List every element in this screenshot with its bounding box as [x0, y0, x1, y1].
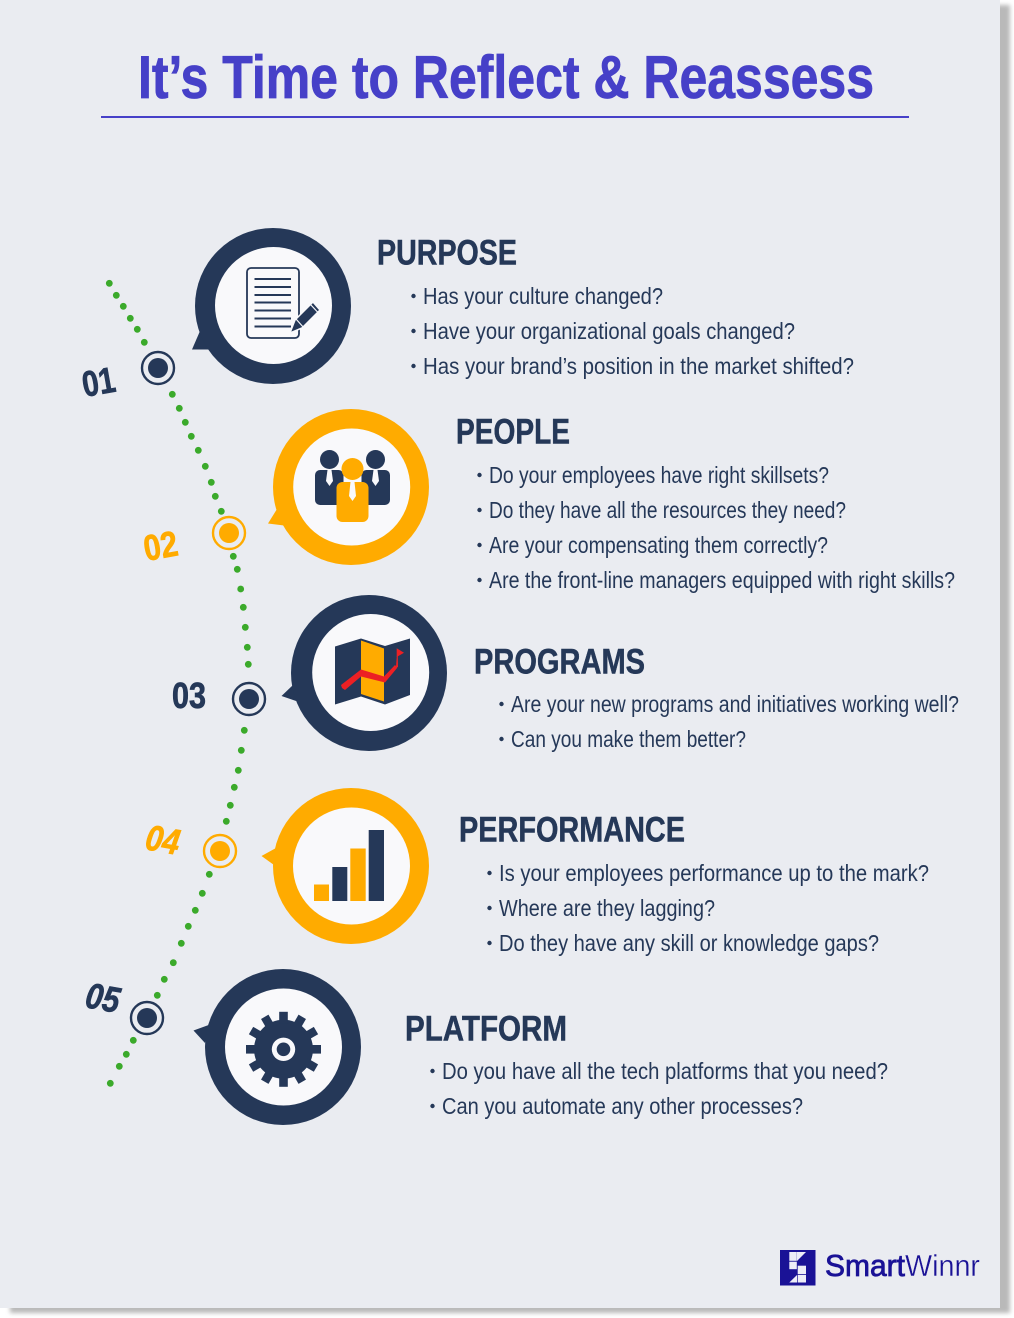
marker 02	[213, 517, 245, 549]
text block: people	[456, 412, 955, 593]
number 01: 01	[79, 359, 118, 405]
text block: people: PEOPLE	[456, 412, 570, 452]
text block: platform: Do you have all the tech platforms that you need?	[442, 1058, 888, 1084]
icon: team	[315, 450, 390, 522]
marker 01	[142, 352, 174, 384]
text block: people: Are your compensating them correctly?	[489, 532, 828, 558]
marker 04	[204, 835, 236, 867]
icon: gear	[246, 1012, 321, 1087]
number 05: 05	[83, 975, 124, 1021]
marker 03	[233, 683, 265, 715]
text block: programs: PROGRAMS	[474, 642, 645, 682]
text block: performance: Is your employees performance up to the mark?	[499, 860, 929, 886]
text block: performance: PERFORMANCE	[459, 810, 685, 850]
text block: people: Do your employees have right skillsets?	[489, 462, 829, 488]
text block: purpose	[377, 234, 854, 379]
text block: purpose: PURPOSE	[377, 234, 517, 272]
icon: bar chart	[314, 830, 384, 901]
text block: performance	[459, 810, 929, 956]
panel: purpose badge	[192, 228, 351, 384]
text block: platform: PLATFORM	[405, 1010, 567, 1048]
text block: performance: Do they have any skill or knowledge gaps?	[499, 930, 879, 956]
text block: platform: Can you automate any other processes?	[442, 1093, 803, 1119]
panel: people badge	[268, 409, 429, 565]
number 02: 02	[140, 523, 181, 569]
dotted timeline	[106, 280, 252, 1087]
text block: purpose: Has your culture changed?	[423, 283, 663, 309]
marker 05	[131, 1002, 163, 1034]
icon: document and pencil	[247, 268, 320, 338]
title: It’s Time to Reflect & Reassess	[138, 44, 874, 111]
number 04: 04	[143, 817, 183, 863]
icon: map with route	[335, 638, 410, 704]
text block: platform	[405, 1010, 888, 1119]
logo: SmartWinnr: Smart	[825, 1248, 905, 1283]
text block: programs	[474, 642, 959, 752]
text block: performance: Where are they lagging?	[499, 895, 715, 921]
panel: programs badge	[282, 595, 447, 751]
text block: programs: Can you make them better?	[511, 726, 746, 752]
number 03: 03	[172, 675, 206, 716]
text block: purpose: Have your organizational goals changed?	[423, 318, 795, 344]
logo: SmartWinnr: Winnr	[905, 1248, 980, 1283]
text block: purpose: Has your brand’s position in the market shifted?	[423, 353, 854, 379]
panel: performance badge	[262, 788, 429, 944]
logo: SmartWinnr	[780, 1248, 980, 1286]
panel: platform badge	[194, 969, 361, 1125]
text block: people: Do they have all the resources they need?	[489, 497, 846, 523]
